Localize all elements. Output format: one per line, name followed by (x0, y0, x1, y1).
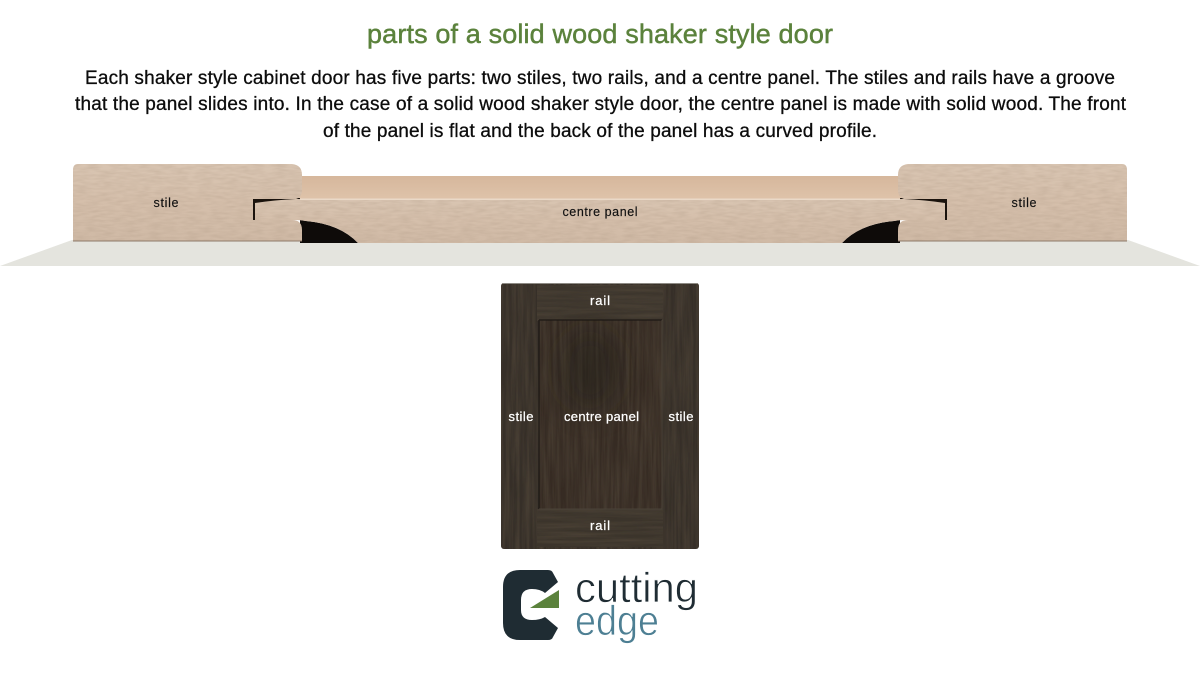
right stile (898, 164, 1127, 241)
intro text block: Each shaker style cabinet door has five parts: two stiles, two rails, and a centre panel. The stiles and rails have a groove (85, 68, 1115, 89)
door top rail (537, 285, 663, 321)
logo mark (503, 570, 558, 640)
intro text block: of the panel is flat and the back of the panel has a curved profile. (323, 121, 877, 142)
table surface (0, 240, 1200, 266)
left stile (73, 164, 302, 241)
door centre panel (539, 320, 662, 509)
door bottom rail (537, 509, 663, 547)
curved cut shadows (300, 220, 900, 243)
logo word: cutting: cutting (575, 564, 698, 611)
door labels: stile (668, 409, 694, 424)
door labels (508, 293, 694, 533)
groove shadows (252, 198, 948, 221)
intro text block: that the panel slides into. In the case of a solid wood shaker style door, the centre panel is made with solid wood. The front (75, 94, 1127, 115)
door labels: rail (590, 518, 610, 533)
door labels: centre panel (564, 409, 639, 424)
intro text block (75, 68, 1127, 142)
label: centre panel: centre panel (562, 205, 638, 219)
label: stile: stile (1012, 196, 1037, 210)
panel back face (298, 176, 902, 201)
centre panel (255, 198, 945, 243)
title: parts of a solid wood shaker style door (367, 19, 833, 49)
door labels: stile (508, 409, 534, 424)
cross-section diagram (73, 164, 1127, 243)
door labels: rail (590, 293, 610, 308)
door stiles (501, 283, 699, 549)
label: stile: stile (154, 196, 179, 210)
logo word: edge: edge (575, 597, 659, 644)
door photo (501, 283, 699, 549)
logo: cutting edge (503, 564, 698, 644)
